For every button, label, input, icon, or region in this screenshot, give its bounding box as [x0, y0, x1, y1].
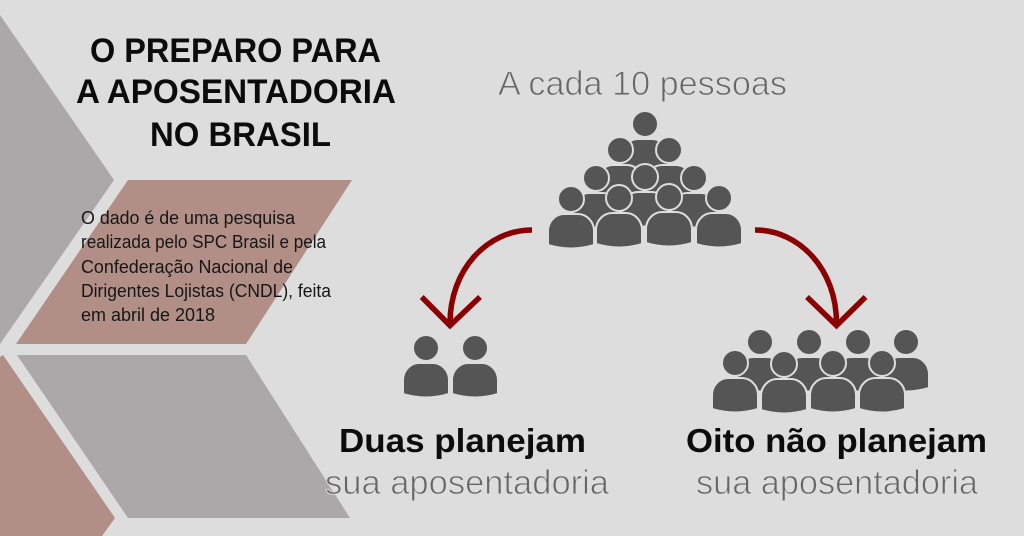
- title: A APOSENTADORIA: [76, 73, 396, 111]
- label: two plan: [325, 422, 609, 502]
- icon: two people: [403, 335, 498, 398]
- label: eight do not plan: sua aposentadoria: [696, 464, 978, 502]
- description text: O dado é de uma pesquisa: [81, 207, 296, 228]
- shape: grey parallelogram bottom: [17, 355, 350, 518]
- label: eight do not plan: Oito não planejam: [686, 422, 987, 459]
- label: eight do not plan: [686, 422, 987, 502]
- heading: a cada 10 pessoas: A cada 10 pessoas: [498, 65, 787, 103]
- title: [76, 32, 396, 154]
- icon: eight people: [712, 329, 929, 414]
- description text: em abril de 2018: [81, 304, 215, 325]
- description text: [81, 207, 332, 325]
- arrow: right to eight people: [755, 230, 866, 326]
- shape: grey chevron top left: [0, 15, 114, 344]
- shape: rose chevron bottom left: [0, 355, 115, 536]
- description text: Confederação Nacional de: [81, 256, 293, 277]
- description text: realizada pelo SPC Brasil e pela: [81, 231, 327, 252]
- panel: rose parallelogram behind description: [16, 180, 352, 344]
- arrow: left to two people: [422, 230, 532, 326]
- title: NO BRASIL: [150, 116, 331, 154]
- label: two plan: sua aposentadoria: [325, 464, 609, 502]
- title: O PREPARO PARA: [90, 32, 381, 70]
- label: two plan: Duas planejam: [339, 422, 586, 459]
- description text: Dirigentes Lojistas (CNDL), feita: [81, 280, 332, 301]
- icon: group of ten people: [548, 111, 742, 248]
